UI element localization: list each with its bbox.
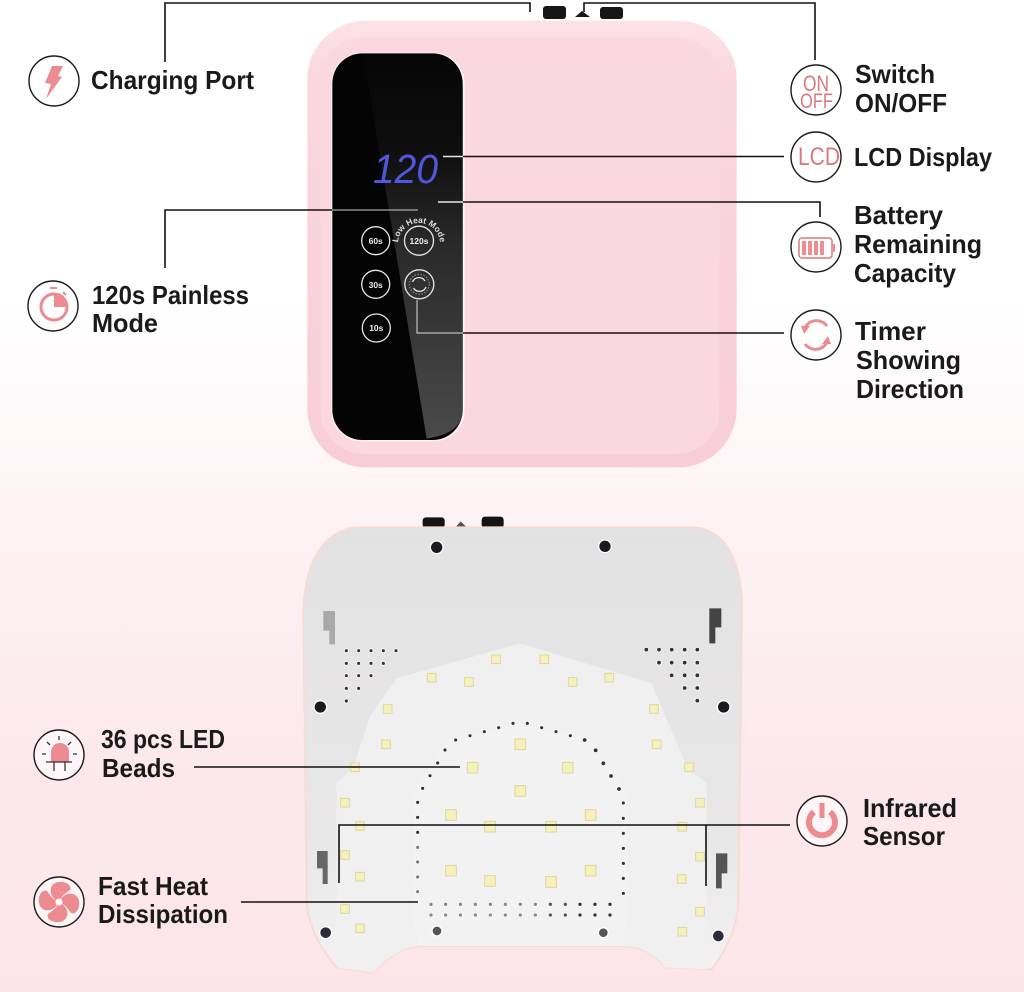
touch buttons bbox=[361, 218, 445, 343]
touch control panel bbox=[331, 53, 465, 441]
callout: LCD display bbox=[791, 132, 992, 182]
reflector inner surface bbox=[337, 643, 707, 973]
bottom vent rows bbox=[429, 902, 612, 917]
callout: 36 pcs LED beads: 36 pcs LED bbox=[101, 724, 225, 754]
top view of lamp bbox=[307, 6, 737, 468]
icon: on off: ON bbox=[803, 71, 829, 96]
callout: fast heat dissipation: Fast Heat bbox=[98, 871, 208, 901]
callout: switch on/off: ON/OFF bbox=[855, 88, 947, 118]
callout: infrared sensor: Infrared bbox=[863, 793, 957, 823]
touch buttons: 120s bbox=[410, 236, 429, 246]
callout: battery remaining capacity: Capacity bbox=[854, 258, 956, 288]
callout: battery remaining capacity bbox=[791, 200, 982, 288]
callout: LCD display: LCD Display bbox=[854, 142, 992, 172]
icon: on off: OFF bbox=[800, 90, 833, 113]
lamp bottom shell bbox=[303, 527, 742, 973]
callout: switch on/off bbox=[791, 59, 947, 118]
callout: 36 pcs LED beads: Beads bbox=[102, 753, 175, 783]
icon: fan bbox=[34, 877, 84, 927]
touch buttons: 10s bbox=[369, 323, 384, 333]
callout: fast heat dissipation bbox=[34, 871, 228, 929]
LCD readout: 120 bbox=[373, 146, 438, 192]
callout: timer showing direction bbox=[791, 310, 964, 404]
callout: timer showing direction: Timer bbox=[855, 316, 926, 346]
icon: lightning bolt bbox=[29, 56, 79, 106]
lamp top body bbox=[307, 21, 737, 467]
icon: LED bulb bbox=[34, 730, 84, 780]
icon: rotating arrows bbox=[791, 310, 841, 360]
callout: fast heat dissipation: Dissipation bbox=[98, 899, 228, 929]
callout: charging port: Charging Port bbox=[91, 65, 254, 95]
central raised area bbox=[413, 723, 627, 946]
lamp top knobs bbox=[543, 6, 623, 19]
lamp bottom knobs bbox=[423, 517, 504, 528]
leader lines bbox=[165, 3, 820, 902]
clip slots bbox=[317, 608, 727, 888]
callout: timer showing direction: Direction bbox=[856, 374, 964, 404]
mounting holes bbox=[314, 540, 730, 942]
callout: battery remaining capacity: Battery bbox=[854, 200, 944, 230]
callout: 120s painless mode bbox=[28, 280, 249, 338]
callout: 36 pcs LED beads bbox=[34, 724, 225, 783]
touch buttons: 60s bbox=[369, 236, 383, 246]
callout: switch on/off: Switch bbox=[855, 59, 935, 89]
icon: stopwatch bbox=[28, 281, 78, 331]
callout: 120s painless mode: Mode bbox=[92, 308, 158, 338]
vent holes bbox=[344, 647, 700, 895]
icon: power symbol bbox=[797, 796, 847, 846]
callout: infrared sensor: Sensor bbox=[863, 821, 945, 851]
callout: timer showing direction: Showing bbox=[856, 345, 961, 375]
bottom view of lamp bbox=[303, 517, 742, 973]
callout: 120s painless mode: 120s Painless bbox=[92, 280, 249, 310]
icon: battery bbox=[791, 222, 841, 272]
icon: LCD: LCD bbox=[798, 143, 840, 171]
callout: charging port bbox=[29, 56, 254, 106]
icon: on off bbox=[791, 65, 841, 115]
LED beads bbox=[341, 655, 704, 936]
callout: infrared sensor bbox=[797, 793, 957, 851]
icon: LCD bbox=[791, 132, 841, 182]
touch buttons: 30s bbox=[369, 280, 383, 290]
callout: battery remaining capacity: Remaining bbox=[854, 229, 982, 259]
touch buttons: Low Heat Mode bbox=[392, 218, 445, 242]
